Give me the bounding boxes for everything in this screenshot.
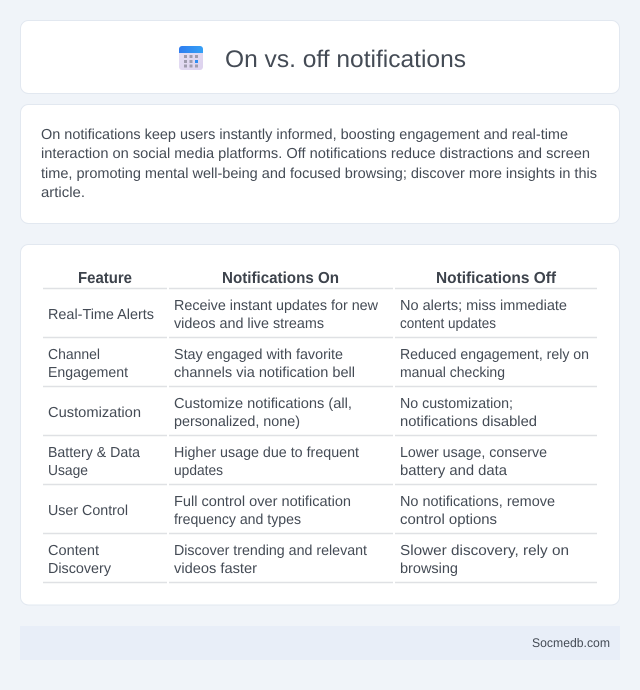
- row: channel engagement: [43, 347, 597, 386]
- row: real-time alerts: Receive instant updates for new: [174, 298, 379, 314]
- row: battery and data usage: [43, 445, 597, 484]
- row: user control: [43, 494, 597, 534]
- row: customization: personalized, none): [174, 414, 300, 430]
- row: real-time alerts: Real-Time Alerts: [48, 307, 154, 323]
- table header: Notifications On: [222, 270, 339, 287]
- icon: calendar: [179, 46, 203, 70]
- title: On vs. off notifications: [225, 46, 466, 73]
- row: channel engagement: Reduced engagement, rely on: [400, 347, 589, 363]
- panel: comparison table: [20, 244, 620, 605]
- row: content discovery: Discovery: [48, 561, 112, 577]
- row: content discovery: Content: [48, 543, 99, 559]
- text block: introduction: article.: [41, 185, 85, 201]
- table header: [43, 270, 597, 288]
- text block: introduction: interaction on social media platforms. Off notifications reduce distractions and screen: [41, 146, 590, 162]
- row: user control: User Control: [48, 503, 128, 519]
- row: battery and data usage: Higher usage due to frequent: [174, 445, 359, 461]
- row: real-time alerts: videos and live streams: [174, 316, 324, 332]
- row: customization: Customize notifications (all,: [174, 396, 352, 412]
- row: channel engagement: Stay engaged with favorite: [174, 347, 343, 363]
- row: user control: No notifications, remove: [400, 494, 555, 510]
- row: channel engagement: Engagement: [48, 365, 128, 381]
- footer: [20, 626, 620, 660]
- row: battery and data usage: Usage: [48, 463, 88, 479]
- panel: title: [20, 20, 620, 94]
- panel: introduction: [20, 104, 620, 224]
- table header: Notifications Off: [436, 270, 557, 287]
- text block: introduction: [41, 127, 597, 201]
- row: content discovery: Discover trending and relevant: [174, 543, 367, 559]
- row: user control: control options: [400, 512, 497, 528]
- row: channel engagement: manual checking: [400, 365, 505, 381]
- row: customization: [43, 396, 597, 436]
- row: battery and data usage: Lower usage, conserve: [400, 445, 547, 461]
- row: content discovery: Slower discovery, rely on: [400, 543, 569, 559]
- row: channel engagement: channels via notification bell: [174, 365, 355, 381]
- row: content discovery: browsing: [400, 561, 458, 577]
- row: channel engagement: Channel: [48, 347, 100, 363]
- row: battery and data usage: updates: [174, 463, 223, 479]
- row: user control: Full control over notification: [174, 494, 351, 510]
- row: user control: frequency and types: [174, 512, 301, 528]
- row: real-time alerts: [43, 298, 597, 338]
- footer source text: Socmedb.com: [532, 636, 610, 650]
- row: battery and data usage: Battery & Data: [48, 445, 141, 461]
- table header: Feature: [78, 270, 132, 287]
- row: battery and data usage: battery and data: [400, 463, 508, 479]
- row: customization: notifications disabled: [400, 414, 537, 430]
- row: customization: No customization;: [400, 396, 513, 412]
- row: customization: Customization: [48, 405, 141, 421]
- text block: introduction: On notifications keep users instantly informed, boosting engagement and real-time: [41, 127, 568, 143]
- row: real-time alerts: No alerts; miss immediate: [400, 298, 567, 314]
- text block: introduction: time, promoting mental well-being and focused browsing; discover more insights in this: [41, 166, 597, 182]
- row: content discovery: [43, 543, 597, 582]
- row: content discovery: videos faster: [174, 561, 257, 577]
- row: real-time alerts: content updates: [400, 316, 496, 332]
